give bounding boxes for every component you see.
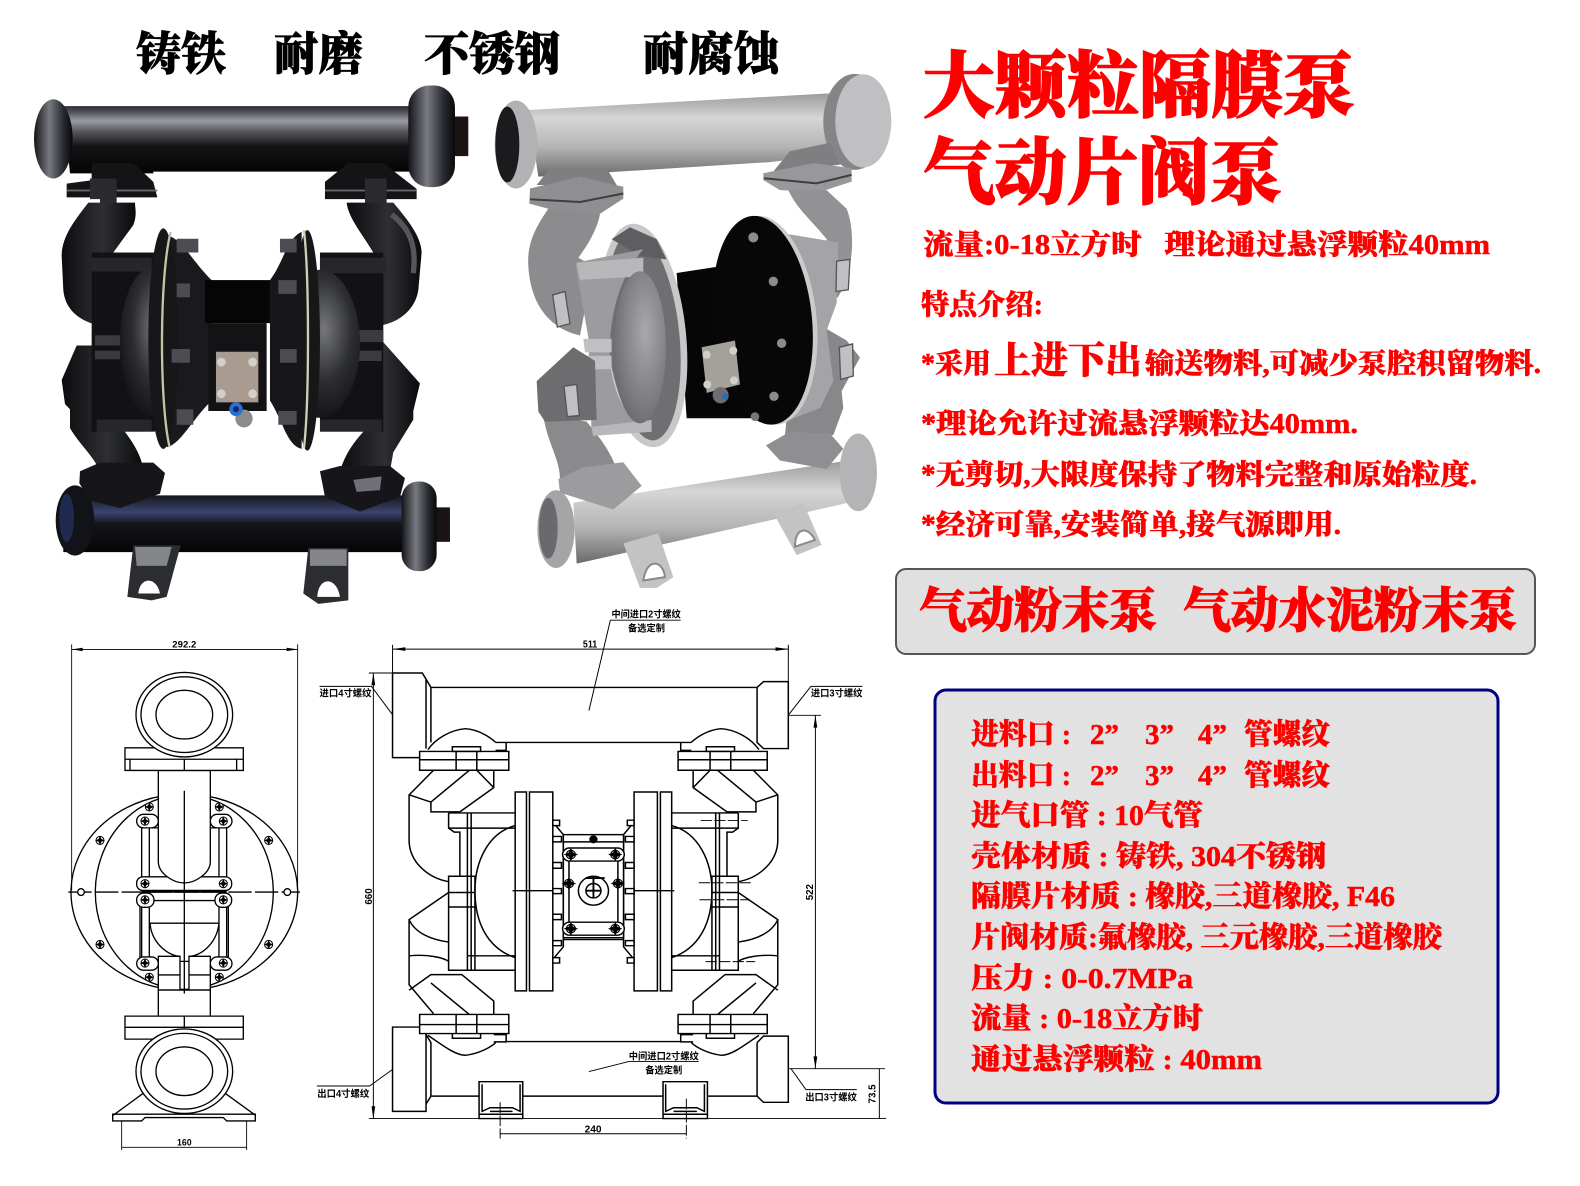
bolt markers xyxy=(78,802,291,982)
left half of pump body xyxy=(409,729,563,1055)
upper union collars xyxy=(529,177,623,214)
dimension 522: 522 xyxy=(805,884,816,900)
upper manifold pipe xyxy=(528,93,855,177)
disc bolts xyxy=(748,232,758,243)
lower port rings and base xyxy=(113,1029,255,1121)
product photo: stainless steel pump xyxy=(495,74,891,588)
feature 1: 上进下出 xyxy=(994,340,1142,382)
spec: outlet xyxy=(971,758,1330,792)
upper right flange xyxy=(408,85,455,187)
spec: pressure: 压力 : 0-0.7MPa xyxy=(971,962,1194,995)
spec: outlet: 4” xyxy=(1198,760,1227,792)
upper left port xyxy=(34,99,73,178)
top manifold outline xyxy=(393,673,788,758)
callout: middle inlet top: 备选定制 xyxy=(628,622,665,634)
spec: outlet: 2” xyxy=(1090,760,1119,792)
lower manifold pipe xyxy=(573,461,848,564)
dimension 292.2: 292.2 xyxy=(172,640,196,650)
flow summary line: 流量:0-18立方时 理论通过悬浮颗粒40mm xyxy=(923,228,1490,261)
title line 1: 大颗粒隔膜泵 xyxy=(923,47,1355,127)
callout: middle inlet bottom: 备选定制 xyxy=(645,1064,682,1077)
spec: inlet: 3” xyxy=(1145,719,1174,751)
dimension 660: 660 xyxy=(364,888,375,905)
caption: cast iron: 铸铁 xyxy=(136,29,226,80)
valve plate xyxy=(702,341,740,393)
mounting feet xyxy=(479,1082,707,1119)
feature 3: *无剪切,大限度保持了物料完整和原始粒度. xyxy=(921,458,1477,491)
dimension 522 xyxy=(788,715,885,1069)
mounting feet xyxy=(127,545,181,600)
dimension 292.2 xyxy=(72,640,298,890)
callout: outlet 4 inch xyxy=(317,1070,392,1100)
caption: stainless steel: 不锈钢 xyxy=(424,29,560,80)
inner cones xyxy=(165,235,212,447)
spec: flow: 流量 : 0-18立方时 xyxy=(971,1002,1203,1035)
feature 1: 输送物料,可减少泵腔积留物料. xyxy=(1144,347,1541,380)
lower right flange xyxy=(402,482,437,571)
banner text left: 气动粉末泵 xyxy=(919,585,1157,638)
callout: outlet 4 inch: 出口4寸螺纹 xyxy=(317,1087,369,1100)
dimension 73.5: 73.5 xyxy=(867,1084,879,1103)
right dome xyxy=(280,270,360,418)
spec: valve material: 片阀材质:氟橡胶, 三元橡胶,三道橡胶 xyxy=(971,920,1445,954)
dashed centre marks xyxy=(500,821,755,1138)
lower union collars xyxy=(79,463,165,508)
features heading: 特点介绍: xyxy=(921,288,1043,321)
feature 1 xyxy=(921,340,1541,382)
right black disc xyxy=(703,211,822,430)
right elbows xyxy=(347,203,422,327)
upper port rings xyxy=(136,672,233,757)
left lower housing xyxy=(537,347,597,422)
dimension 511: 511 xyxy=(583,640,598,651)
right lower elbow xyxy=(785,327,860,435)
left upper elbow xyxy=(528,209,600,335)
right half of pump body xyxy=(624,729,778,1055)
callout: middle inlet bottom: 中间进口2寸螺纹 xyxy=(629,1049,699,1062)
product photo: cast iron pump xyxy=(34,85,468,604)
caption: wear resistant: 耐磨 xyxy=(274,29,363,80)
dimension 240: 240 xyxy=(585,1124,602,1135)
callout: inlet 4 inch: 进口4寸螺纹 xyxy=(320,687,372,699)
air valve body xyxy=(205,280,270,323)
spec: inlet xyxy=(971,717,1330,751)
left lower elbow xyxy=(543,415,620,479)
right end plug upper xyxy=(450,116,468,156)
bottom manifold outline xyxy=(393,1027,788,1111)
spec: inlet: 进料口 : xyxy=(971,718,1071,751)
main title xyxy=(923,47,1355,214)
title line 2: 气动片阀泵 xyxy=(923,134,1282,214)
callout: inlet 4 inch xyxy=(320,686,392,714)
dimension 73.5 xyxy=(867,1069,879,1119)
upper manifold pipe xyxy=(63,106,413,173)
spec: outlet: 出料口 : xyxy=(971,759,1071,792)
left elbows xyxy=(62,203,136,327)
left tie rods xyxy=(577,258,652,436)
features block xyxy=(921,288,1541,541)
callout: middle inlet bottom xyxy=(589,1049,699,1077)
left dome highlight xyxy=(614,271,666,423)
spec: outlet: 3” xyxy=(1145,760,1174,792)
technical drawing: front view xyxy=(317,608,886,1138)
flange bolts xyxy=(172,239,297,425)
spec: shell material: 壳体材质 : 铸铁, 304不锈钢 xyxy=(971,839,1326,873)
cast labels xyxy=(553,259,853,417)
dimension 660 xyxy=(364,673,886,1119)
callout: inlet 3 inch xyxy=(789,686,862,714)
side view body disc xyxy=(71,794,298,991)
feature 1: *采用 xyxy=(921,348,991,380)
spec: diaphragm material: 隔膜片材质 : 橡胶,三道橡胶, F46 xyxy=(971,879,1395,913)
spec: air inlet: 进气口管 : 10气管 xyxy=(971,799,1203,832)
callout: middle inlet top xyxy=(589,608,681,711)
mounting feet xyxy=(623,533,673,588)
callout: outlet 3 inch: 出口3寸螺纹 xyxy=(805,1091,857,1103)
centre pipe and flanges xyxy=(68,748,300,1039)
left dome with flange ring xyxy=(593,223,694,448)
right housing xyxy=(780,234,838,423)
upper left port xyxy=(495,101,537,188)
specification panel xyxy=(935,690,1498,1103)
spec: inlet: 4” xyxy=(1198,719,1227,751)
left housing xyxy=(575,249,653,435)
technical drawing: side view xyxy=(68,640,300,1150)
left flange shoulder xyxy=(612,227,667,259)
feature 4: *经济可靠,安装简单,接气源即用. xyxy=(921,508,1341,541)
caption: corrosion resistant: 耐腐蚀 xyxy=(643,29,784,80)
callout: inlet 3 inch: 进口3寸螺纹 xyxy=(811,687,862,699)
elbow highlight xyxy=(392,215,414,273)
left dome xyxy=(120,268,183,416)
lower end plug xyxy=(433,507,450,542)
lower union collars xyxy=(558,462,642,510)
cylinder housings xyxy=(92,253,155,432)
air valve centre xyxy=(563,835,624,940)
dimension 511 xyxy=(393,640,788,682)
manifold necks xyxy=(537,143,840,185)
dimension 160: 160 xyxy=(177,1138,192,1148)
spec: inlet: 管螺纹 xyxy=(1244,717,1330,751)
banner: powder pump names xyxy=(896,569,1535,654)
spec: particle size: 通过悬浮颗粒 : 40mm xyxy=(971,1042,1262,1076)
spec: inlet: 2” xyxy=(1090,719,1119,751)
spec: outlet: 管螺纹 xyxy=(1244,758,1330,792)
right disc rim xyxy=(707,211,827,430)
callout: outlet 3 inch xyxy=(791,1069,857,1103)
flange rings xyxy=(148,228,178,449)
lower right flange xyxy=(840,433,877,511)
upper union collars xyxy=(67,163,417,199)
right upper elbow xyxy=(788,190,852,307)
material captions above pumps xyxy=(136,29,784,80)
black centre section xyxy=(677,263,757,418)
callout: middle inlet top: 中间进口2寸螺纹 xyxy=(611,608,681,621)
air fitting xyxy=(713,387,729,403)
valve plate xyxy=(216,352,258,402)
dimension 160 xyxy=(122,1121,247,1150)
lower left port xyxy=(537,490,575,568)
banner text right: 气动水泥粉末泵 xyxy=(1183,585,1517,638)
feature 2: *理论允许过流悬浮颗粒达40mm. xyxy=(921,407,1358,440)
air fitting xyxy=(235,410,253,427)
upper right flange xyxy=(823,74,887,170)
lower manifold pipe xyxy=(63,495,407,552)
